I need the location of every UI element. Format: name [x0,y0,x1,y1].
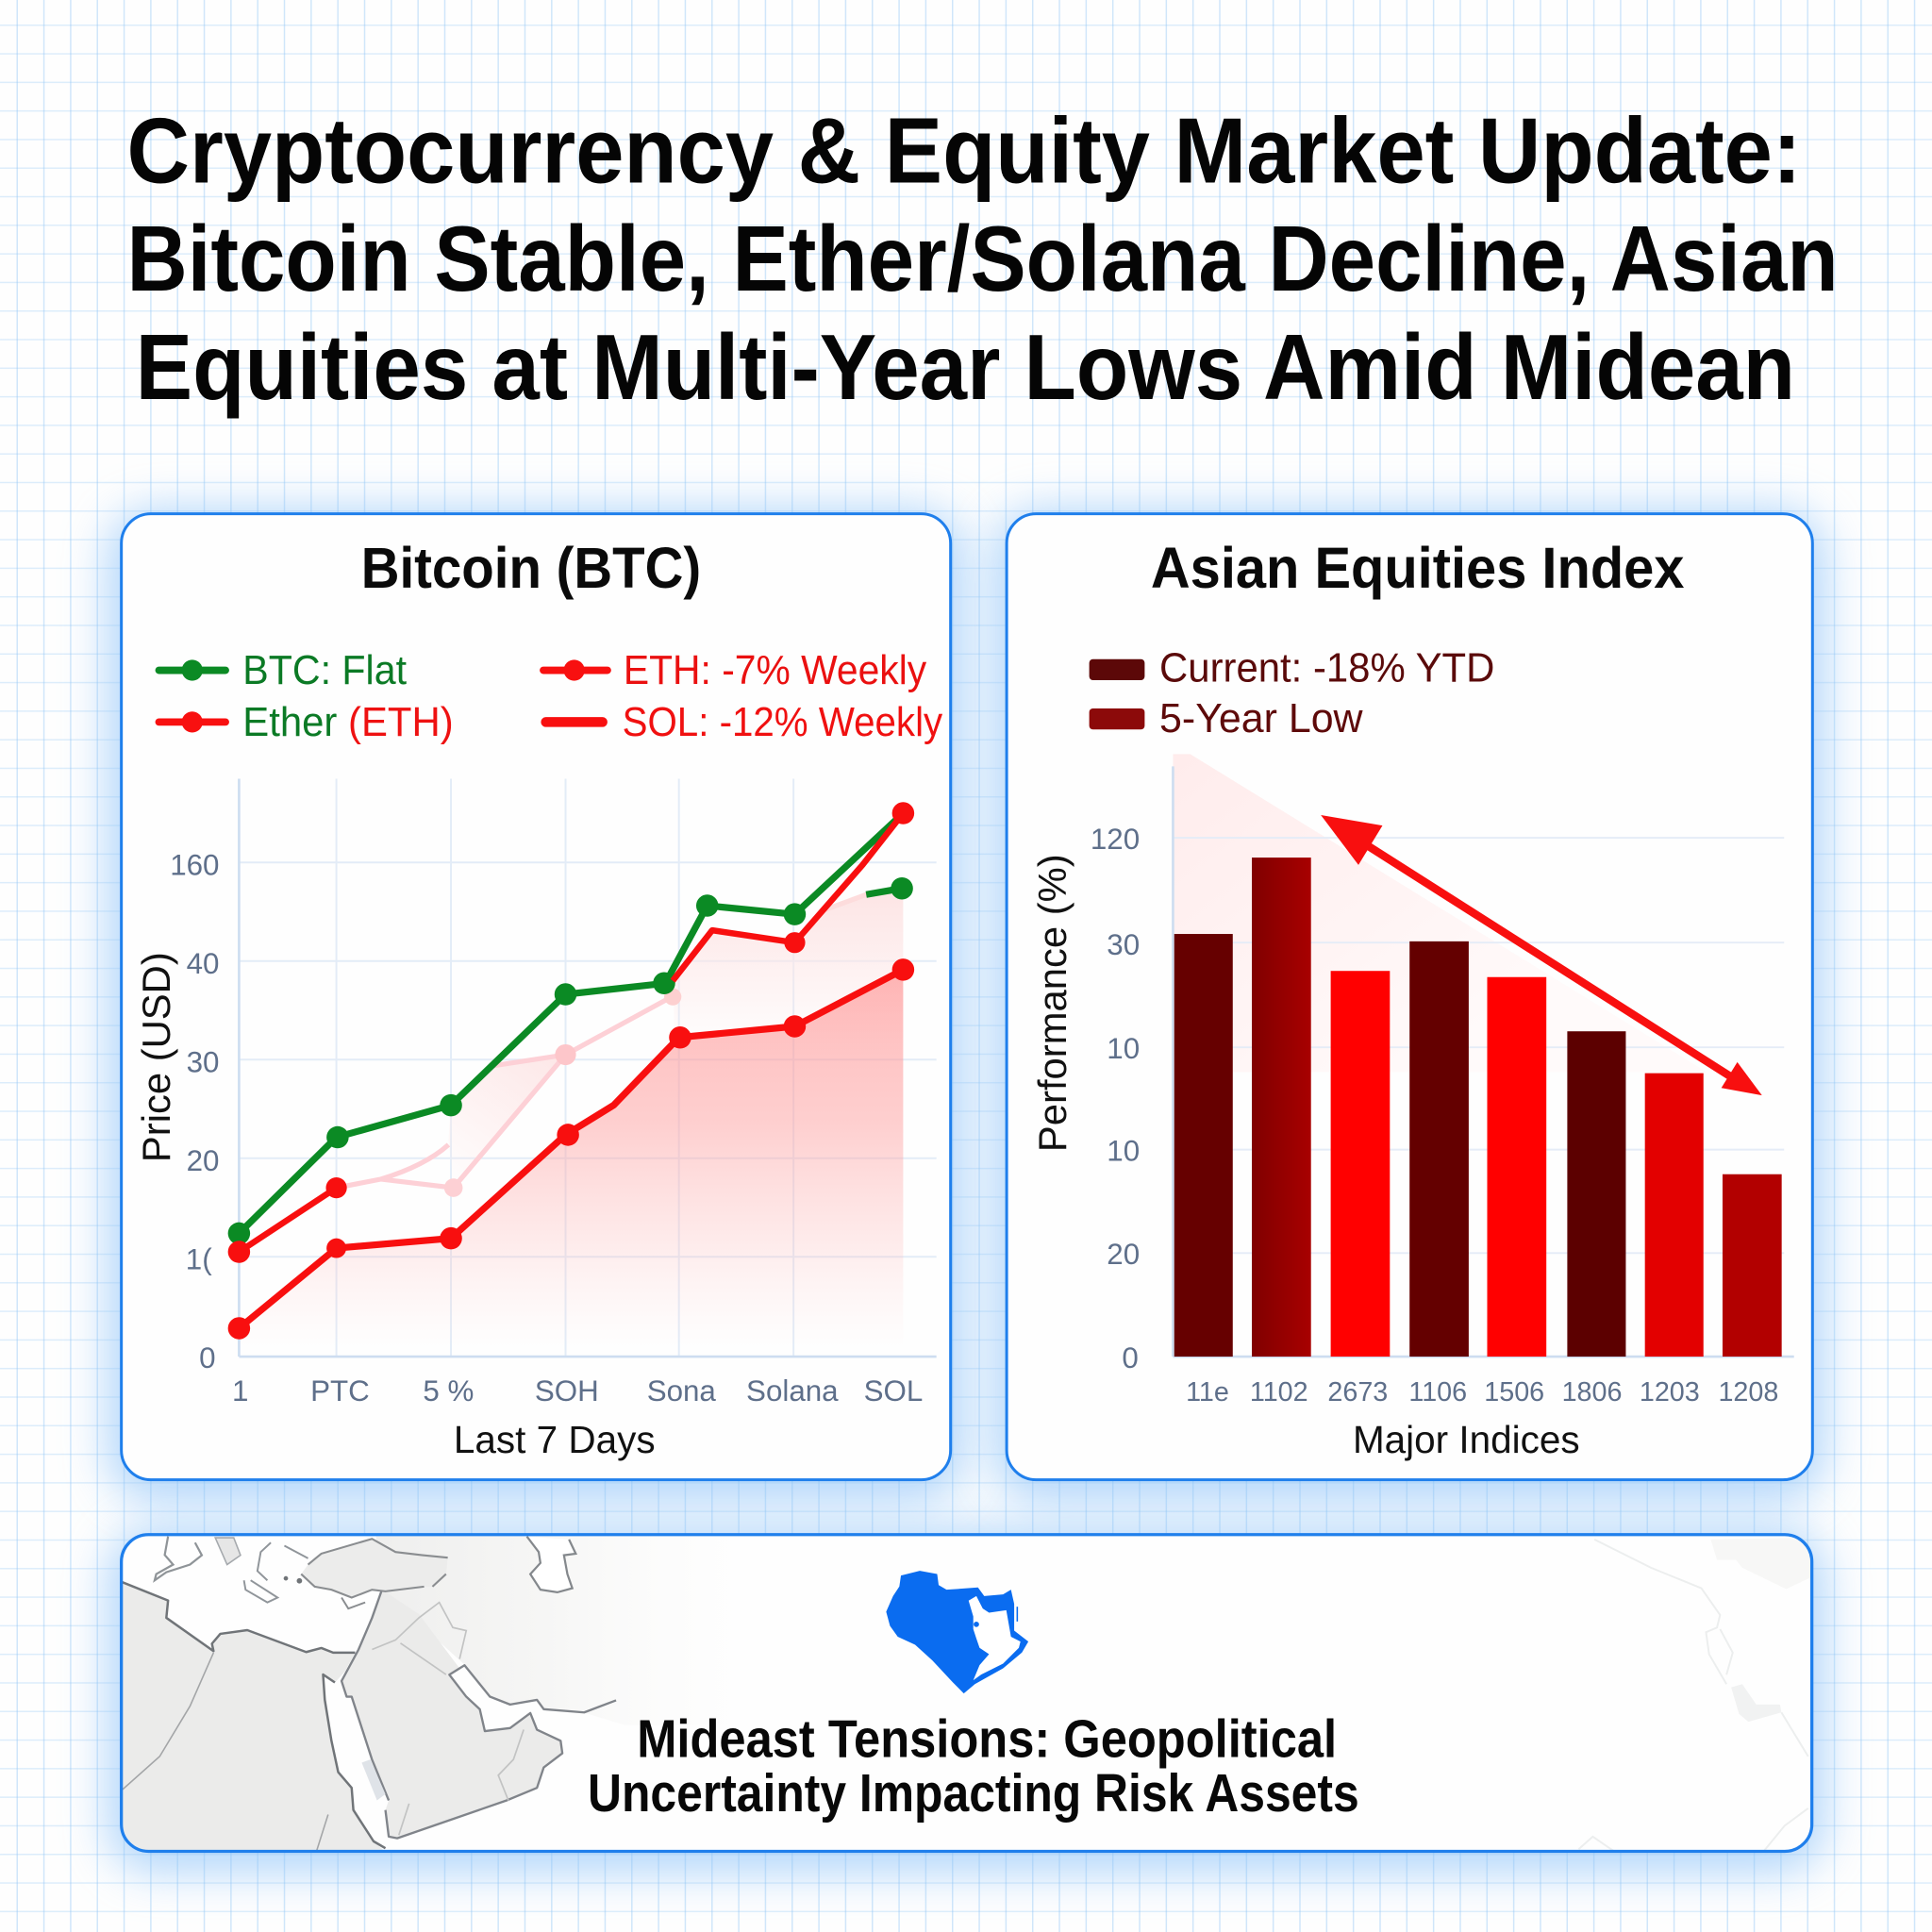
x axis ticks: 1208 [1718,1377,1778,1407]
y axis ticks: 40 [187,947,219,980]
series: ETH [228,802,914,1263]
x axis ticks: SOH [535,1374,599,1407]
caption [588,1709,1359,1823]
legend: crypto series: BTC: Flat [242,648,407,693]
panel border [122,1535,1812,1851]
legend: crypto series: ETH: -7% Weekly [624,648,927,693]
x axis ticks: 11e [1186,1377,1229,1407]
x axis ticks: SOL [864,1374,923,1407]
panel: mideast tensions [122,1535,1812,1852]
x axis ticks: 1203 [1640,1377,1700,1407]
legend: crypto series: SOL: -12% Weekly [623,700,943,745]
y axis ticks [1091,823,1140,1374]
x axis title: Last 7 Days [454,1418,656,1461]
y axis ticks: 160 [170,848,219,881]
y axis ticks [170,848,219,1374]
legend: equities: Current: -18% YTD [1159,645,1494,691]
title: Equities at Multi-Year Lows Amid Midean [136,315,1795,419]
x axis ticks: 1806 [1562,1377,1622,1407]
y axis ticks: 1( [186,1242,212,1275]
x axis ticks: 1106 [1408,1377,1467,1407]
y axis ticks: 20 [1107,1238,1140,1271]
x axis ticks: 1102 [1250,1377,1308,1407]
title [127,98,1839,419]
y axis ticks: 0 [199,1341,216,1374]
y axis title: Price (USD) [134,952,178,1162]
panel: bitcoin line chart [122,514,951,1480]
pale ghost series [337,887,903,1197]
panel: asian equities bar chart [1007,514,1812,1480]
legend: crypto series [158,648,943,745]
heading: Asian Equities Index: Asian Equities Index [1151,536,1684,601]
x axis title: Major Indices [1353,1418,1580,1461]
map: middle east background [122,1535,1811,1852]
heading: Bitcoin (BTC): Bitcoin (BTC) [361,536,701,601]
x axis ticks [232,1374,923,1407]
x axis ticks: 5 % [423,1374,474,1407]
arrow: decline trend [1321,815,1762,1095]
y axis ticks: 20 [187,1144,219,1177]
legend: equities [1090,645,1494,741]
bar chart [1173,754,1794,1357]
icon: blue region map [886,1571,1028,1693]
y axis ticks: 10 [1107,1134,1140,1167]
y axis ticks: 30 [1107,928,1140,961]
caption: Mideast Tensions: Geopolitical [637,1709,1337,1769]
x axis ticks: 1506 [1484,1377,1544,1407]
y axis ticks: 120 [1091,823,1140,856]
x axis ticks [1186,1377,1778,1407]
x axis ticks: PTC [310,1374,370,1407]
x axis ticks: 1 [232,1374,248,1407]
y axis title: Performance (%) [1030,854,1074,1152]
y axis ticks: 0 [1122,1341,1139,1374]
x axis ticks: Solana [746,1374,839,1407]
title: Cryptocurrency & Equity Market Update: [127,98,1802,202]
series: SOL area and line [228,958,914,1357]
y axis ticks: 10 [1107,1032,1140,1065]
caption: Uncertainty Impacting Risk Assets [588,1763,1359,1823]
x axis ticks: Sona [647,1374,716,1407]
legend: equities: 5-Year Low [1159,696,1363,741]
y axis ticks: 30 [187,1045,219,1078]
legend: crypto series: Ether (ETH) [242,700,454,745]
series: BTC [228,813,913,1244]
x axis ticks: 2673 [1327,1377,1388,1407]
line chart plot [228,778,937,1357]
